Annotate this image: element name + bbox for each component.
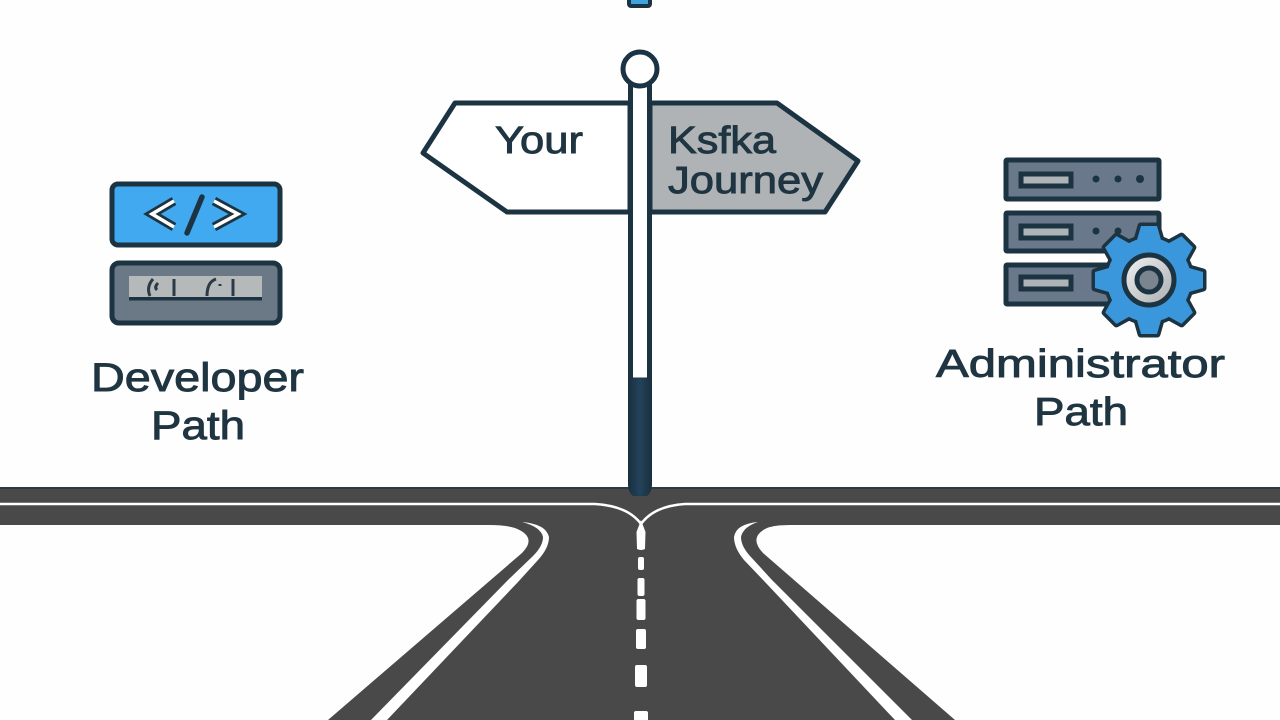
right road edge line [734, 522, 912, 720]
signpost [423, 52, 858, 496]
developer path label: Path [151, 404, 245, 448]
junction line [0, 504, 1280, 524]
developer path icon [112, 184, 280, 323]
server rack 2 [1006, 213, 1159, 251]
server rack 3 [1006, 265, 1159, 304]
code window [112, 184, 280, 245]
administrator path icon [1006, 160, 1203, 334]
terminal strip [129, 276, 262, 297]
administrator path label: Path [1034, 391, 1128, 434]
pole lower [628, 378, 652, 496]
server rack 1 [1006, 160, 1159, 199]
pole upper [630, 80, 650, 380]
road surface [0, 487, 1280, 720]
left sign: Your [423, 103, 630, 212]
right sign: Kafka Journey: Ksfka [668, 120, 777, 162]
junction stem [636, 520, 646, 550]
terminal glyphs [149, 279, 233, 296]
right sign: Kafka Journey: Journey [668, 160, 823, 202]
gear [1095, 226, 1203, 334]
road intersection [0, 487, 1280, 720]
developer path label [91, 356, 304, 448]
right sign: Kafka Journey [650, 103, 858, 212]
road top edge [0, 487, 1280, 489]
administrator path label: Administrator [936, 343, 1225, 386]
developer path label: Developer [91, 356, 304, 400]
left road edge line [371, 522, 549, 720]
administrator path label [936, 343, 1225, 434]
dashed centre line [634, 557, 648, 720]
top cropped blue marker [629, 0, 650, 6]
pole cap [623, 52, 657, 86]
gear hub [1124, 255, 1174, 305]
terminal panel [112, 263, 280, 323]
left sign: Your: Your [495, 120, 583, 162]
code brackets [152, 197, 238, 233]
